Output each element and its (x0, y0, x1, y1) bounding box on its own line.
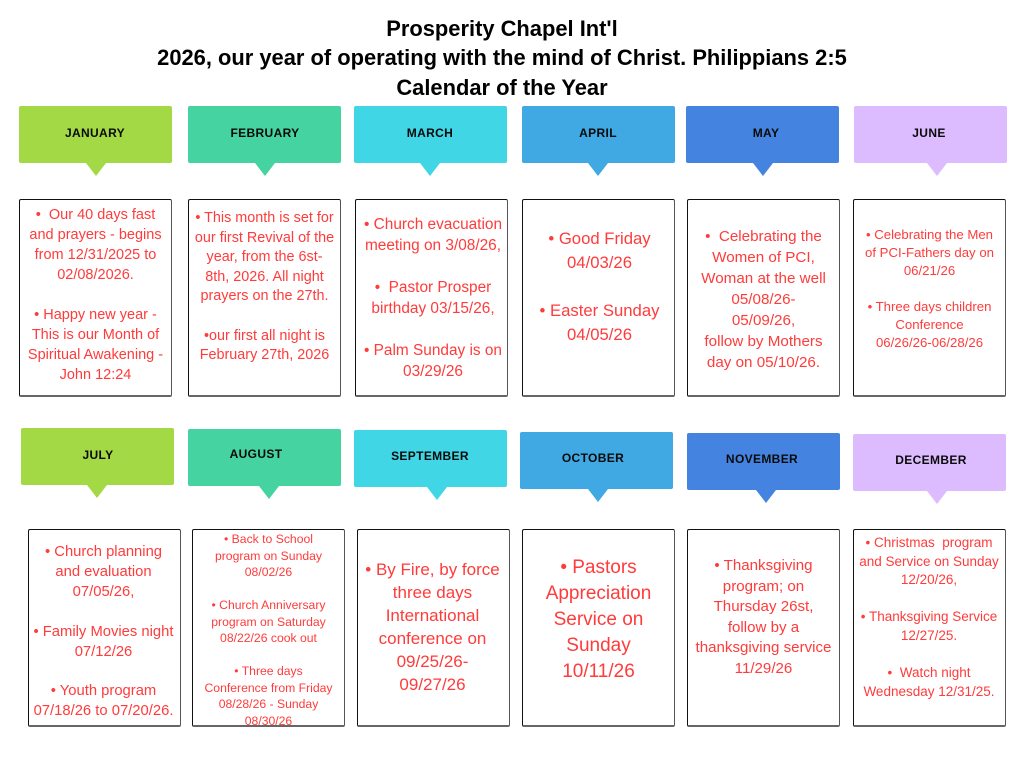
header: September (354, 430, 507, 500)
panel: June events (853, 199, 1006, 397)
panel: January events: from 12/31/2025 to (35, 247, 156, 263)
panel: August events: program on Saturday (211, 614, 326, 628)
panel: March events: meeting on 3/08/26, (365, 237, 501, 254)
panel: February events: 8th, 2026. All night (205, 269, 324, 285)
title (157, 16, 847, 100)
panel: July events: • Youth program (51, 683, 156, 699)
header: September: SEPTEMBER (391, 449, 469, 463)
panel: May events (687, 199, 840, 397)
panel: February events: •our first all night is (204, 328, 325, 344)
panel: July events: 07/05/26, (73, 584, 134, 600)
panel: July events: and evaluation (55, 564, 152, 580)
header: January (19, 106, 172, 176)
panel: July events (28, 529, 181, 727)
panel: December events: 12/27/25. (901, 628, 957, 643)
header: July (21, 428, 174, 498)
panel: September events: 09/25/26- (397, 652, 468, 671)
panel: January events: 02/08/2026. (57, 267, 134, 283)
panel: January events: and prayers - begins (29, 227, 162, 243)
panel: October events: Appreciation (546, 583, 651, 604)
panel: June events: • Celebrating the Men (866, 227, 993, 242)
header: March: MARCH (407, 126, 453, 140)
panel: May events: 05/09/26, (732, 312, 795, 329)
panel: October events: • Pastors (560, 557, 637, 578)
panel: May events: 05/08/26- (731, 291, 796, 308)
panel: January events: • Happy new year - (34, 307, 157, 323)
panel: November events: Thursday 26st, (714, 598, 813, 615)
header: April (522, 106, 675, 176)
panel: August events (192, 529, 345, 727)
panel: October events: Service on (554, 609, 643, 630)
panel: January events: This is our Month of (32, 327, 159, 343)
header: December: DECEMBER (895, 453, 967, 467)
panel: September events: International (386, 606, 479, 625)
panel: May events: • Celebrating the (705, 228, 822, 245)
panel: April events: 04/05/26 (567, 325, 632, 344)
panel: December events: 12/20/26, (901, 572, 957, 587)
title: Calendar of the Year (396, 74, 608, 100)
panel: March events: • Pastor Prosper (375, 279, 491, 296)
panel: December events: Wednesday 12/31/25. (863, 684, 995, 699)
panel: March events: • Church evacuation (364, 216, 502, 233)
header: February (188, 106, 341, 176)
header: August (188, 429, 341, 499)
panel: September events: three days (393, 583, 472, 602)
panel: January events (19, 199, 172, 397)
panel: August events: program on Sunday (215, 548, 322, 562)
panel: January events: • Our 40 days fast (36, 207, 155, 223)
title: Prosperity Chapel Int'l (386, 16, 618, 40)
panel: March events: 03/29/26 (403, 363, 463, 380)
panel: November events: thanksgiving service (696, 639, 831, 656)
header: March (354, 106, 507, 176)
panel: April events: • Easter Sunday (540, 301, 659, 320)
header: November (687, 433, 840, 503)
panel: November events: program; on (723, 578, 804, 594)
header: August: AUGUST (230, 447, 282, 461)
panel: March events: • Palm Sunday is on (364, 342, 502, 359)
panel: June events: of PCI-Fathers day on (865, 245, 994, 260)
panel: February events: our first Revival of the (195, 230, 334, 246)
panel: July events: • Church planning (45, 544, 162, 560)
panel: January events: Spiritual Awakening - (28, 347, 163, 363)
panel: August events: 08/22/26 cook out (220, 631, 317, 645)
header: May: MAY (753, 126, 779, 140)
panel: August events: 08/02/26 (245, 565, 292, 579)
panel: November events: follow by a (728, 618, 799, 636)
panel: February events: year, from the 6st- (207, 249, 322, 265)
panel: February events: • This month is set for (195, 210, 334, 226)
panel: February events (188, 199, 341, 397)
panel: April events (522, 199, 675, 397)
header: May (686, 106, 839, 176)
panel: September events: 09/27/26 (399, 675, 466, 694)
panel: November events: 11/29/26 (735, 660, 792, 676)
panel: June events: 06/26/26-06/28/26 (876, 335, 983, 350)
header: April: APRIL (579, 126, 617, 140)
panel: August events: • Back to School (224, 532, 313, 546)
panel: October events: Sunday (566, 635, 631, 656)
panel: August events: 08/28/26 - Sunday (219, 697, 318, 711)
panel: January events: John 12:24 (60, 367, 131, 383)
panel: May events: Women of PCI, (712, 249, 815, 266)
panel: November events (687, 529, 840, 727)
panel: April events: 04/03/26 (567, 253, 632, 272)
panel: June events: 06/21/26 (904, 263, 955, 278)
panel: August events: • Three days (234, 664, 303, 678)
panel: July events: 07/12/26 (75, 644, 132, 660)
header: July: JULY (82, 448, 113, 462)
panel: February events: February 27th, 2026 (200, 347, 329, 363)
panel: September events (357, 529, 510, 727)
panel: September events: conference on (379, 629, 486, 648)
panel: May events: day on 05/10/26. (707, 354, 820, 371)
panel: September events: • By Fire, by force (365, 560, 500, 579)
panel: June events: Conference (895, 317, 964, 332)
header: October: OCTOBER (562, 451, 624, 465)
header: December (853, 434, 1006, 504)
header: November: NOVEMBER (726, 452, 798, 466)
header: June: JUNE (912, 126, 946, 140)
panel: March events (355, 199, 508, 397)
header: October (520, 432, 673, 502)
panel: December events: • Thanksgiving Service (861, 609, 997, 624)
panel: October events (522, 529, 675, 727)
panel: June events: • Three days children (868, 299, 991, 314)
panel: May events: follow by Mothers (704, 333, 823, 350)
panel: March events: birthday 03/15/26, (371, 300, 495, 317)
header: February: FEBRUARY (230, 126, 300, 140)
panel: December events: and Service on Sunday (859, 554, 999, 569)
panel: December events: • Watch night (887, 665, 970, 680)
panel: July events: • Family Movies night (33, 624, 174, 640)
panel: October events: 10/11/26 (562, 661, 635, 682)
panel: August events: • Church Anniversary (211, 598, 326, 612)
panel: February events: prayers on the 27th. (200, 288, 328, 304)
panel: April events: • Good Friday (548, 229, 651, 248)
panel: May events: Woman at the well (701, 270, 826, 287)
header: January: JANUARY (65, 126, 125, 140)
panel: November events: • Thanksgiving (714, 557, 813, 574)
panel: July events: 07/18/26 to 07/20/26. (34, 703, 173, 719)
header: June (854, 106, 1007, 176)
panel: December events (853, 529, 1006, 727)
panel: December events: • Christmas program (865, 535, 992, 550)
title: 2026, our year of operating with the mind of Christ. Philippians 2:5 (157, 45, 847, 70)
panel: August events: Conference from Friday (204, 680, 333, 694)
